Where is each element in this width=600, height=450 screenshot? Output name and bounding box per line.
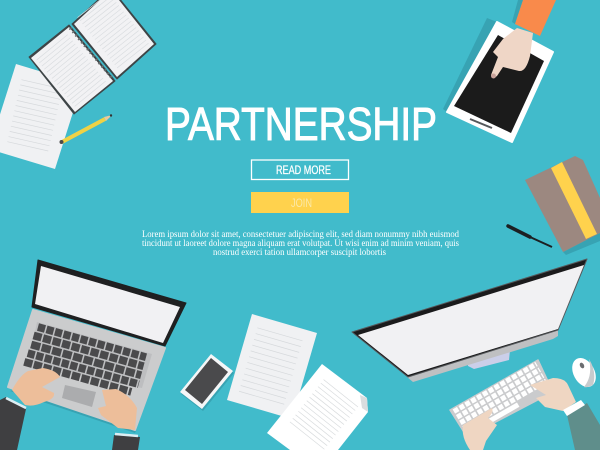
sleeve [567, 403, 600, 450]
notebook spiral binding [70, 28, 112, 78]
icon: pen [508, 226, 552, 247]
open notebook [29, 0, 156, 114]
closed brown notebook [525, 156, 600, 255]
sheet of paper top left [0, 64, 82, 169]
laptop screen [32, 260, 186, 346]
folded corner [360, 395, 368, 412]
icon: mouse [567, 354, 600, 391]
monitor screen [358, 265, 584, 375]
laptop keyboard [24, 322, 152, 393]
monitor bezel [352, 259, 587, 377]
body text: tincidunt ut laoreet dolore magna aliquam erat volutpat. Ut wisi enim ad minim veniam, quis [142, 238, 459, 248]
title: PARTNERSHIP [165, 98, 437, 150]
hands on desktop keyboard [463, 378, 600, 450]
notebook left page [29, 25, 115, 114]
body text: nostrud exerci tation ullamcorper suscipit lobortis [213, 247, 386, 257]
smartphone [180, 354, 234, 411]
tablet body [447, 22, 553, 142]
button: join [251, 192, 349, 213]
body text: Lorem ipsum dolor sit amet, consectetuer adipiscing elit, sed diam nonummy nibh euismod [142, 229, 459, 239]
button: read more: READ MORE [276, 163, 331, 177]
sheet of paper bottom centre [227, 314, 317, 419]
tablet screen [454, 35, 544, 133]
tablet with pointing hand [443, 0, 556, 142]
button: read more [252, 160, 348, 180]
yellow band [551, 162, 597, 239]
button: join: JOIN [291, 196, 312, 210]
left hand [463, 408, 497, 450]
pointing hand [491, 28, 533, 78]
body text [142, 229, 459, 257]
right hand [530, 378, 576, 411]
icon: pencil [60, 114, 112, 144]
right hand and sleeve [98, 389, 140, 450]
desktop monitor [352, 259, 587, 382]
tablet shadow [443, 18, 497, 112]
desktop keyboard [450, 360, 553, 437]
notebook cover [525, 156, 600, 252]
trackpad [62, 385, 96, 407]
left hand and sleeve [0, 368, 60, 450]
orange sleeve [512, 0, 556, 36]
notebook shadow [563, 233, 600, 255]
laptop base [8, 310, 165, 433]
shirt cuff [563, 400, 585, 416]
monitor chin [407, 330, 558, 382]
sheet of paper with folded corner [267, 364, 368, 450]
monitor stand [468, 350, 510, 369]
laptop with hands [0, 260, 186, 450]
notebook right page [72, 0, 156, 79]
